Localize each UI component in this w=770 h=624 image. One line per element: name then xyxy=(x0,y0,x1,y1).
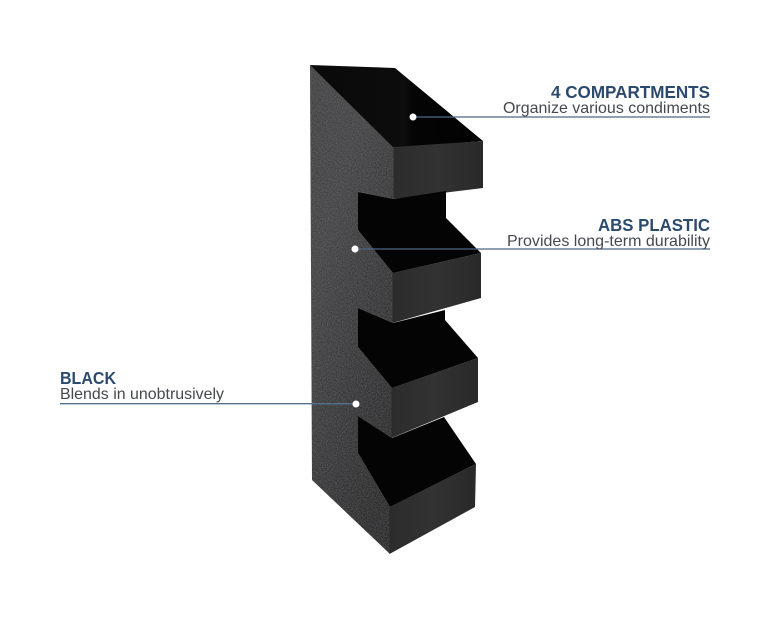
compartment 3 front xyxy=(392,358,478,438)
leader line xyxy=(60,403,356,405)
compartment 1 front xyxy=(394,141,483,199)
description: Provides long-term durability xyxy=(507,233,710,250)
heading: 4 COMPARTMENTS xyxy=(551,82,710,102)
callout: 4 compartments xyxy=(410,82,710,120)
callout: ABS plastic xyxy=(352,215,710,252)
heading: BLACK xyxy=(60,368,116,388)
compartment 2 front xyxy=(392,253,481,323)
compartment 4 interior xyxy=(358,416,476,507)
dot xyxy=(352,400,360,408)
compartment 3 interior xyxy=(358,308,478,388)
side panel xyxy=(310,65,394,554)
compartment 4 front xyxy=(390,464,476,554)
compartment 1 interior xyxy=(310,65,483,148)
leader line xyxy=(413,116,710,118)
dot xyxy=(352,246,358,252)
heading: ABS PLASTIC xyxy=(598,215,710,235)
callout: black xyxy=(60,368,360,408)
leader line xyxy=(355,248,710,250)
dot xyxy=(410,114,416,120)
description: Blends in unobtrusively xyxy=(60,386,224,403)
description: Organize various condiments xyxy=(503,100,710,117)
organizer product xyxy=(310,65,483,554)
compartment 2 interior xyxy=(358,191,481,273)
